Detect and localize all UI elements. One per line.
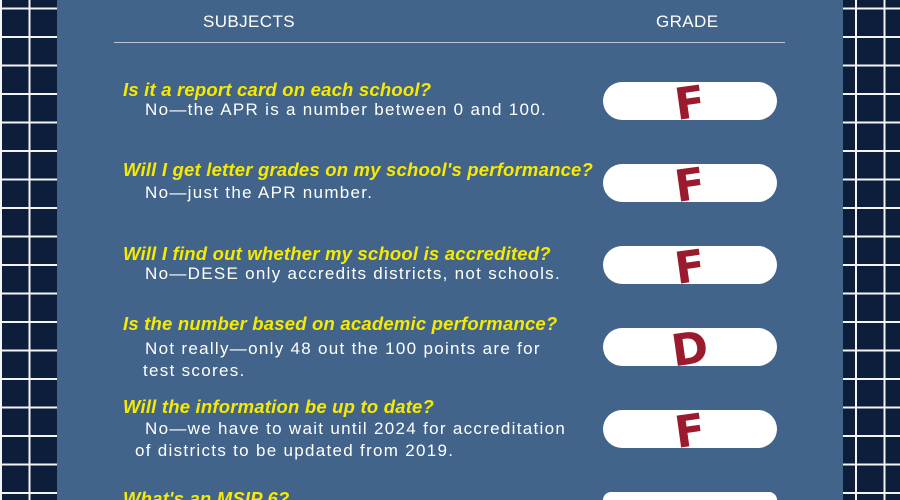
grade pill 3 — [603, 246, 777, 284]
answer 4 — [143, 339, 541, 380]
answer 5 — [135, 419, 566, 460]
question 2: Will I get letter grades on my school's performance? — [123, 159, 593, 180]
grade pill 2: F — [672, 158, 708, 213]
answer 4: test scores. — [143, 361, 246, 380]
question 1: Is it a report card on each school? — [123, 79, 431, 100]
grade pill 2 — [603, 164, 777, 202]
grade pill 5 — [603, 410, 777, 448]
answer 5: of districts to be updated from 2019. — [135, 441, 454, 460]
grade pill 5: F — [672, 404, 708, 459]
answer 1: No—the APR is a number between 0 and 100. — [145, 100, 547, 119]
answer 4: Not really—only 48 out the 100 points are for — [145, 339, 541, 358]
grade pill 3: F — [672, 240, 708, 295]
grade pill 4 — [603, 328, 777, 366]
answer 3: No—DESE only accredits districts, not schools. — [145, 264, 561, 283]
answer 2: No—just the APR number. — [145, 183, 373, 202]
question 5: Will the information be up to date? — [123, 396, 434, 417]
grade pill 1: F — [672, 76, 708, 131]
heading: grade: GRADE — [656, 12, 718, 31]
heading: subjects: SUBJECTS — [203, 12, 295, 31]
answer 5: No—we have to wait until 2024 for accreditation — [145, 419, 566, 438]
grade pill 6 — [603, 492, 777, 500]
grade pill 1 — [603, 82, 777, 120]
question 4: Is the number based on academic performance? — [123, 313, 557, 334]
question 3: Will I find out whether my school is accredited? — [123, 243, 551, 264]
grade pill 4: D — [668, 322, 712, 377]
